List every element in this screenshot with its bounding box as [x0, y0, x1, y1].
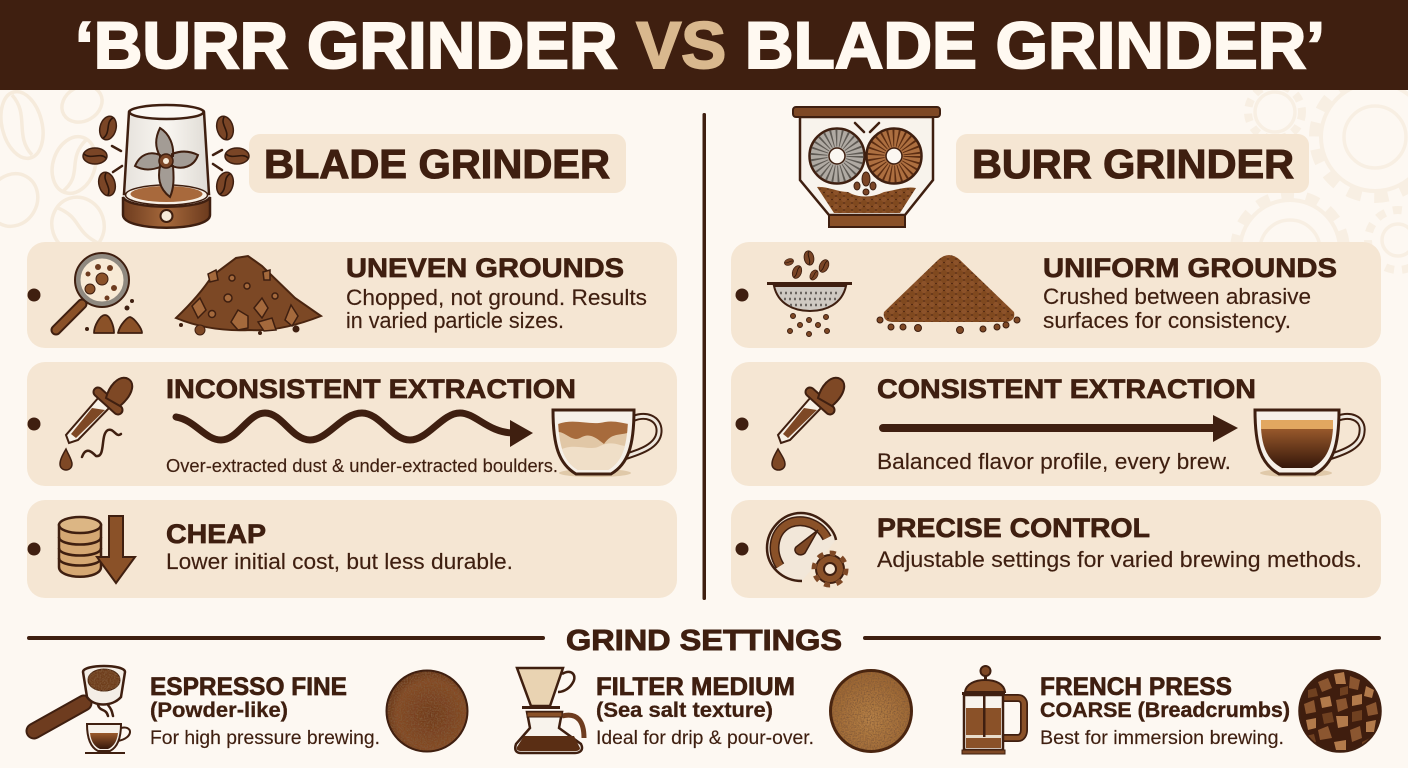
panel: cheap [27, 500, 677, 598]
text: espresso fine [150, 673, 380, 749]
bullet [28, 288, 40, 302]
text: french press coarse [1040, 673, 1290, 749]
text: precise control heading: PRECISE CONTROL [877, 513, 1150, 543]
text: uneven grounds: in varied particle sizes. [346, 308, 564, 333]
icon: magnifier [56, 253, 142, 333]
swatch: medium grounds [830, 670, 912, 752]
text: uneven grounds: UNEVEN GROUNDS [346, 253, 624, 283]
panel: inconsistent extraction [27, 362, 677, 486]
text: filter medium [596, 673, 814, 749]
title: ‘BURR GRINDER VS BLADE GRINDER’ [75, 8, 1325, 82]
text: cheap heading: CHEAP [166, 519, 266, 549]
panel: consistent extraction [731, 362, 1381, 486]
text: uniform grounds: surfaces for consistency. [1043, 308, 1291, 333]
text: french press coarse: Best for immersion brewing. [1040, 728, 1284, 749]
text: uniform grounds: UNIFORM GROUNDS [1043, 253, 1337, 283]
bullet [28, 542, 40, 556]
setting: french press coarse [962, 666, 1380, 754]
panel: uneven grounds [27, 242, 677, 348]
text: uniform grounds [1043, 253, 1337, 333]
center divider [702, 113, 706, 600]
arrow: wavy extraction [176, 413, 533, 447]
bullet [736, 288, 748, 302]
text: uneven grounds [346, 253, 647, 333]
panel: precise control [731, 500, 1381, 598]
text: uniform grounds: Crushed between abrasive [1043, 284, 1311, 309]
panel: burr grinder heading [956, 134, 1309, 193]
text: french press coarse: FRENCH PRESS [1040, 673, 1232, 701]
icon: dropper [772, 378, 844, 470]
icon: pour-over dripper and carafe [515, 668, 584, 753]
bullet [736, 418, 748, 430]
panel: uniform grounds [731, 242, 1381, 348]
arrow: straight extraction [883, 415, 1238, 442]
section heading: grind settings [27, 625, 1381, 657]
text: filter medium: Ideal for drip & pour-over. [596, 728, 814, 749]
panel: blade grinder heading [249, 134, 626, 193]
icon: blade grinder [83, 105, 249, 228]
text: inconsistent extraction description: Over-extracted dust & under-extracted boulders. [166, 455, 558, 476]
setting: filter medium [515, 668, 912, 753]
text: inconsistent extraction heading: INCONSISTENT EXTRACTION [166, 374, 576, 404]
text: uneven grounds: Chopped, not ground. Results [346, 285, 647, 310]
icon: uniform grounds pile [877, 255, 1020, 334]
section heading: grind settings: GRIND SETTINGS [566, 625, 842, 657]
text: cheap description: Lower initial cost, but less durable. [166, 549, 513, 574]
icon: portafilter and espresso cup [34, 666, 130, 754]
text: espresso fine: (Powder-like) [150, 699, 288, 722]
background watermark: gears [1235, 77, 1408, 305]
text: consistent extraction description: Balanced flavor profile, every brew. [877, 449, 1231, 474]
text: filter medium: (Sea salt texture) [596, 699, 773, 722]
text: consistent extraction heading: CONSISTENT EXTRACTION [877, 374, 1256, 404]
text: espresso fine: For high pressure brewing. [150, 728, 380, 749]
heading: blade grinder: BLADE GRINDER [264, 141, 610, 187]
text: french press coarse: COARSE (Breadcrumbs) [1040, 699, 1290, 722]
icon: coins and down arrow [59, 516, 135, 583]
bullet [736, 542, 748, 556]
icon: sieve [767, 250, 852, 336]
icon: dropper with squiggle [60, 378, 132, 470]
setting: espresso fine [34, 666, 468, 754]
bullet [28, 418, 40, 430]
icon: uneven coffee cup [553, 410, 659, 477]
icon: balanced coffee cup [1255, 410, 1362, 477]
icon: gauge and gear [767, 513, 846, 585]
icon: french press [962, 666, 1024, 754]
text: filter medium: FILTER MEDIUM [596, 673, 795, 701]
icon: uneven grounds pile [176, 256, 321, 335]
text: espresso fine: ESPRESSO FINE [150, 673, 347, 701]
text: precise control description: Adjustable settings for varied brewing methods. [877, 547, 1362, 572]
swatch: coarse grounds [1300, 670, 1380, 752]
title banner [0, 0, 1408, 90]
heading: burr grinder: BURR GRINDER [972, 141, 1294, 187]
swatch: fine grounds [386, 670, 468, 752]
icon: burr grinder [793, 107, 940, 227]
background watermark: coffee beans [0, 79, 111, 260]
